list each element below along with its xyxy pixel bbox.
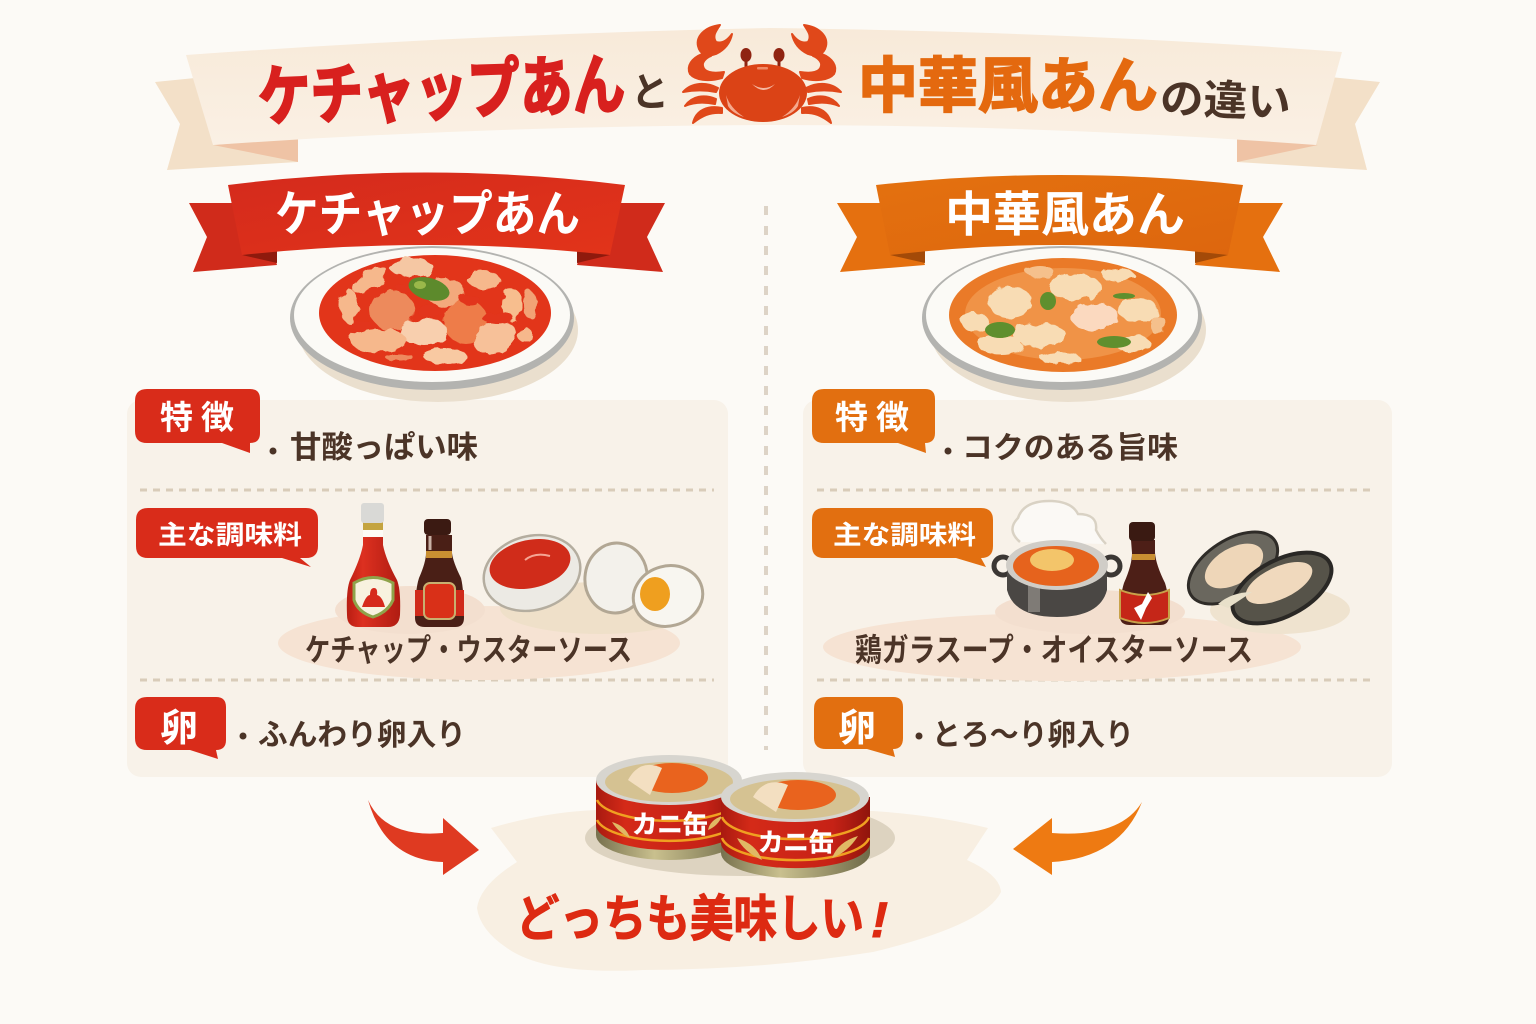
tag: chuka seasonings	[812, 508, 993, 567]
icon: worcester sauce bottle	[415, 519, 464, 627]
ribbon body	[228, 172, 625, 255]
title text: to: と	[631, 71, 669, 115]
text: ketchup seasonings: ケチャップ・ウスターソース	[305, 633, 632, 668]
seasoning backdrop: chuka	[823, 613, 1301, 681]
icon: steam cloud	[1012, 501, 1106, 544]
tag: chuka features: 特徴	[835, 399, 917, 436]
plate rim	[290, 246, 574, 390]
crab and egg pieces	[961, 266, 1166, 364]
banner folds	[213, 138, 1318, 162]
icon: oyster sauce bottle	[1120, 522, 1169, 625]
ribbon tails	[837, 203, 1283, 272]
tag: ketchup seasonings	[136, 508, 318, 567]
icon: oysters	[1176, 517, 1343, 638]
can leaves	[737, 836, 858, 860]
green garnish	[985, 292, 1135, 348]
ribbon body	[876, 175, 1243, 255]
tag: ketchup egg: 卵	[160, 708, 198, 750]
text: ketchup feature: 甘酸っぱい味	[290, 430, 478, 465]
tag: chuka egg: 卵	[838, 708, 876, 750]
panel: chuka background	[803, 400, 1392, 777]
bottom blob	[477, 810, 1001, 971]
arrow: left	[368, 800, 479, 875]
tag: ketchup features	[135, 389, 260, 453]
plate: chuka an dish	[922, 246, 1206, 402]
title text: chuka an: 中華風あん	[858, 53, 1158, 120]
tag: ketchup features: 特徴	[160, 399, 242, 436]
icon: crab can 2	[721, 772, 870, 878]
seasoning backdrop: ketchup	[278, 606, 680, 680]
banner body	[186, 28, 1342, 145]
arrow: right	[1013, 802, 1142, 875]
icon: crab can 1	[596, 755, 742, 860]
plate shadow	[930, 258, 1206, 402]
text: chuka seasonings: 鶏ガラスープ・オイスターソース	[855, 632, 1253, 668]
ribbon text: 中華風あん	[945, 189, 1185, 242]
crab claws and legs	[683, 25, 841, 123]
icon: crab	[683, 25, 841, 123]
icon: ketchup bottle	[347, 503, 400, 627]
icon: whole egg	[580, 539, 652, 617]
title text: ketchup an: ケチャップあん	[257, 48, 626, 134]
can leaves	[612, 816, 722, 838]
crab eyes	[746, 60, 779, 70]
text: ketchup egg: ふんわり卵入り	[258, 719, 466, 752]
tag: chuka egg	[814, 697, 903, 757]
plate rim	[922, 246, 1202, 390]
title banner	[155, 25, 1380, 170]
closing text: !	[866, 892, 894, 948]
ribbon tails	[189, 203, 665, 272]
title text: no chigai: の違い	[1159, 75, 1292, 126]
icon: crab can 1: カニ缶	[632, 811, 708, 839]
text: chuka egg: とろ～り卵入り	[932, 719, 1134, 752]
tag: chuka features	[812, 389, 935, 453]
sauce	[319, 255, 551, 371]
ribbon: chuka an	[837, 175, 1283, 272]
green pepper	[406, 273, 452, 305]
icon: halved egg	[626, 558, 710, 634]
banner right tail	[1237, 76, 1380, 170]
sauce	[949, 258, 1177, 372]
plate shadow	[298, 258, 578, 402]
banner left tail	[155, 76, 298, 170]
panel: ketchup background	[127, 400, 728, 777]
text: chuka feature: コクのある旨味	[962, 432, 1178, 465]
tag: ketchup egg	[135, 697, 226, 759]
ribbon text: ケチャップあん	[275, 188, 580, 242]
icon: stock pot	[994, 540, 1120, 617]
icon: ketchup bowl	[475, 525, 589, 621]
dashed row separators	[140, 490, 1370, 680]
tag: ketchup seasonings: 主な調味料	[158, 520, 302, 550]
ribbon: ketchup an	[189, 172, 665, 272]
crab body	[719, 64, 807, 122]
center dashed divider	[764, 206, 768, 750]
tag: chuka seasonings: 主な調味料	[833, 520, 976, 550]
crab and egg pieces	[340, 259, 536, 363]
icon: crab can 2: カニ缶	[758, 829, 834, 857]
can shadow	[585, 800, 895, 876]
plate: ketchup an dish	[290, 246, 578, 402]
closing text: どっちも美味しい	[516, 891, 864, 947]
